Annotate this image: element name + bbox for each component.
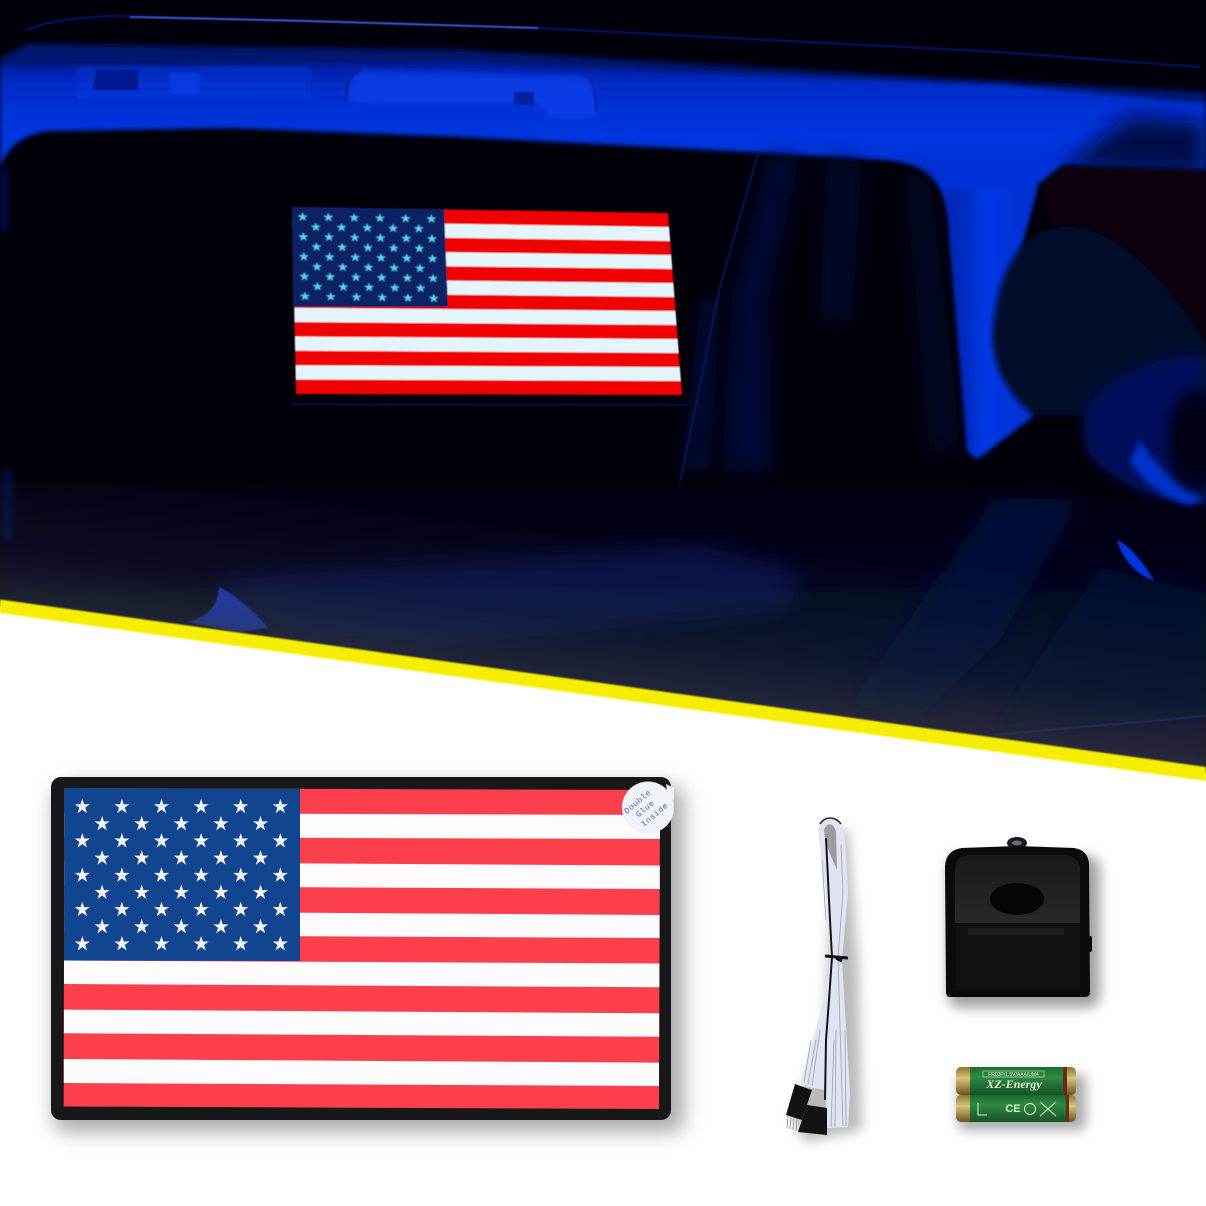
bottom battery <box>956 1095 1076 1122</box>
battery shadow <box>958 1074 1086 1130</box>
panel edge under the window flag <box>291 404 688 405</box>
dark right upper window with seat behind <box>1040 166 1206 350</box>
connector pins <box>787 1115 797 1131</box>
oval badge <box>990 883 1044 915</box>
loop opening <box>824 824 837 870</box>
product: two AAA batteries: CE <box>1005 1103 1021 1115</box>
top cover <box>955 855 1080 923</box>
product: two AAA batteries: XZ-Energy <box>985 1077 1042 1091</box>
connectors <box>786 1084 812 1120</box>
glowing flag in the window <box>292 207 682 395</box>
curtains in the rear window <box>680 154 960 482</box>
cable tie <box>825 956 848 961</box>
product: two AAA batteries: FR03P/1.5V/AAA/UM4 <box>988 1072 1039 1078</box>
dim upper trim band <box>0 44 1206 106</box>
lower cover <box>955 924 1080 990</box>
cable shadow <box>792 830 862 1142</box>
ribbon body <box>801 817 850 1128</box>
panel: car interior photo at night <box>0 0 1206 800</box>
embossed marking <box>968 928 1064 935</box>
dark wire edge <box>820 818 841 824</box>
stripes <box>64 788 660 1109</box>
double glue sticker: Double <box>623 789 654 816</box>
double glue sticker: Glue <box>635 799 657 820</box>
double glue sticker: Inside <box>640 802 671 829</box>
ribbon conductor lines <box>804 845 846 1127</box>
yellow diagonal divider <box>0 600 1206 795</box>
blue rear door panel and pillar <box>0 62 1206 458</box>
product: ribbon cable <box>786 817 862 1142</box>
panel shadow <box>54 786 684 1132</box>
black frame <box>51 777 671 1120</box>
double glue sticker <box>622 782 674 834</box>
top battery <box>956 1067 1076 1095</box>
product: LED flag panel <box>51 777 684 1132</box>
bright reflections on seat <box>0 170 1154 632</box>
seat and lower door panels <box>2 488 1206 766</box>
product: black battery box <box>945 837 1100 1008</box>
box shadow <box>948 856 1100 1008</box>
dome light bracket <box>76 66 311 95</box>
box body <box>945 846 1090 997</box>
canton with stars <box>64 788 300 961</box>
headrest <box>993 227 1206 505</box>
side button <box>1089 936 1092 952</box>
hanging tab <box>1007 837 1027 849</box>
grab handle recess <box>346 70 597 118</box>
bottom haze <box>0 510 1206 772</box>
roof edge highlight <box>25 16 1200 67</box>
product: two AAA batteries <box>956 1067 1086 1130</box>
